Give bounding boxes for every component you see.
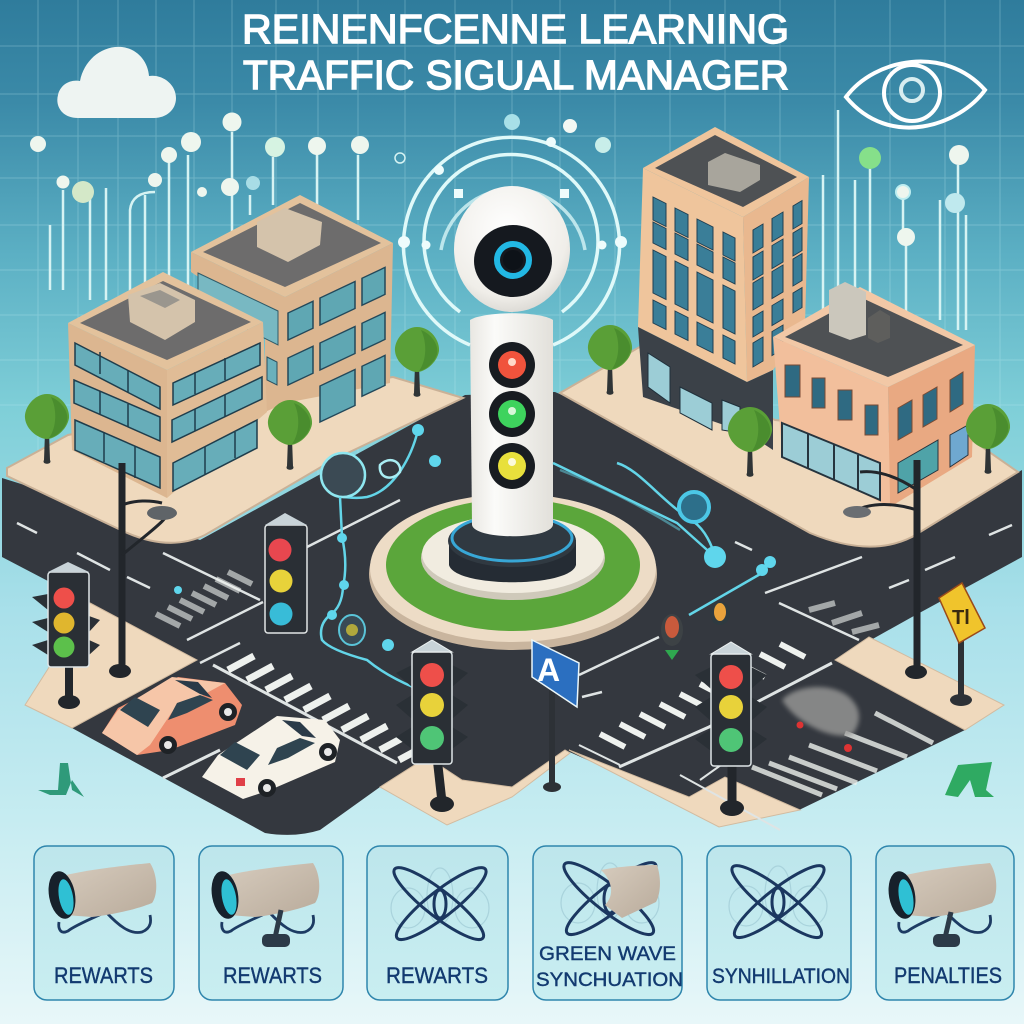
traffic light: front right <box>695 642 767 816</box>
traffic light: mid left <box>265 513 307 633</box>
street lamp: right <box>843 460 927 679</box>
card: rewards 1 <box>34 846 174 1000</box>
signal rings <box>398 137 627 345</box>
sign: blue A: A <box>537 652 560 688</box>
title <box>242 6 789 98</box>
card: rewards 2: REWARTS <box>223 963 322 988</box>
right network dots <box>823 110 969 340</box>
card: rewards 3: REWARTS <box>386 963 488 988</box>
small road signals <box>339 601 730 660</box>
tower base <box>448 515 576 582</box>
crosswalks <box>156 572 933 795</box>
building: left rear <box>191 195 393 437</box>
upper centre dots <box>395 114 611 163</box>
traffic light: front left <box>396 640 468 812</box>
icon: eye outline <box>846 62 985 128</box>
street lamp: left <box>109 463 177 678</box>
card: rewards 1: REWARTS <box>54 963 153 988</box>
left network dots <box>30 112 369 300</box>
building: right low <box>773 282 975 507</box>
card: green wave synchronisation: GREEN WAVE <box>539 944 676 965</box>
right sidewalk <box>560 345 1018 547</box>
card: synchronisation <box>707 846 851 1000</box>
traffic light: far left <box>32 562 100 709</box>
card: green wave synchronisation: SYNCHUATION <box>536 970 683 991</box>
data paths <box>174 424 776 687</box>
building: left front <box>68 272 267 498</box>
roundabout <box>369 494 657 650</box>
lane markings <box>17 500 1012 830</box>
car: pink <box>102 677 242 755</box>
building: right tall <box>638 127 809 450</box>
card: green wave synchronisation <box>533 846 683 1000</box>
central tower <box>448 186 576 582</box>
left sidewalk <box>7 377 463 543</box>
corner sidewalks <box>25 603 1004 827</box>
title: TRAFFIC SIGUAL MANAGER <box>243 52 789 98</box>
card: synchronisation: SYNHILLATION <box>712 965 850 988</box>
card: rewards 2 <box>199 846 343 1000</box>
trees <box>25 325 1010 477</box>
tower lights <box>489 342 535 489</box>
car: white <box>202 716 340 799</box>
small corner icons <box>38 762 994 797</box>
sign: blue A <box>532 640 579 792</box>
road surface <box>2 392 1022 835</box>
card: penalties <box>876 846 1014 1000</box>
icon: cloud <box>57 47 176 118</box>
title: REINENFCENNE LEARNING <box>242 6 789 52</box>
sign: yellow warning: Tl <box>952 607 970 629</box>
tower head <box>454 186 570 312</box>
tower column <box>470 313 553 536</box>
card: rewards 3 <box>367 846 508 1000</box>
sign: yellow warning <box>939 583 985 706</box>
car: motion blur <box>782 687 859 752</box>
card: penalties: PENALTIES <box>894 963 1002 988</box>
